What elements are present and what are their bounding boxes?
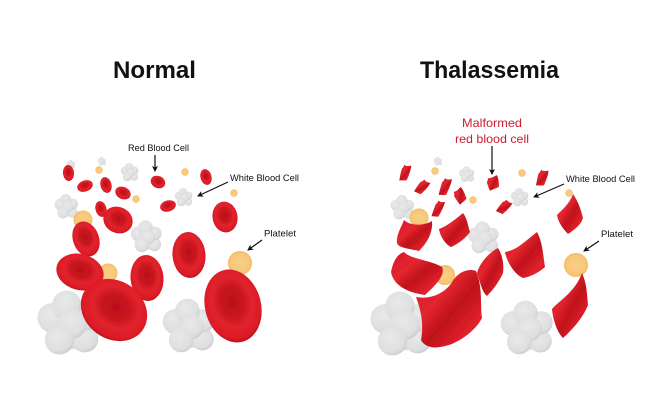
label: Red Blood Cell (128, 143, 189, 171)
red blood cells (52, 165, 270, 354)
label: Red Blood Cell: Red Blood Cell (128, 143, 189, 154)
label: Malformed red blood cell: red blood cell (455, 132, 529, 146)
label: Platelet (thalassemia) (584, 229, 633, 251)
label: Malformed red blood cell (455, 116, 529, 174)
malformed red blood cells (391, 163, 588, 348)
label: White Blood Cell (thalassemia) (534, 174, 635, 197)
panel: thalassemia blood illustration (370, 157, 588, 356)
label: Platelet: Platelet (264, 228, 296, 240)
label: White Blood Cell: White Blood Cell (230, 173, 299, 184)
label: Malformed red blood cell: Malformed (462, 116, 522, 130)
label: Platelet (thalassemia): Platelet (601, 229, 633, 240)
title: Thalassemia: Thalassemia (420, 57, 560, 84)
white blood cells (37, 157, 215, 355)
platelets (74, 166, 252, 282)
white blood cells (370, 157, 553, 356)
platelets (410, 167, 588, 285)
label: White Blood Cell (198, 173, 299, 196)
label: Platelet (248, 228, 296, 250)
title: Normal: Normal (113, 57, 196, 84)
panel: normal blood illustration (37, 157, 270, 355)
label: White Blood Cell (thalassemia): White Blood Cell (566, 174, 635, 185)
